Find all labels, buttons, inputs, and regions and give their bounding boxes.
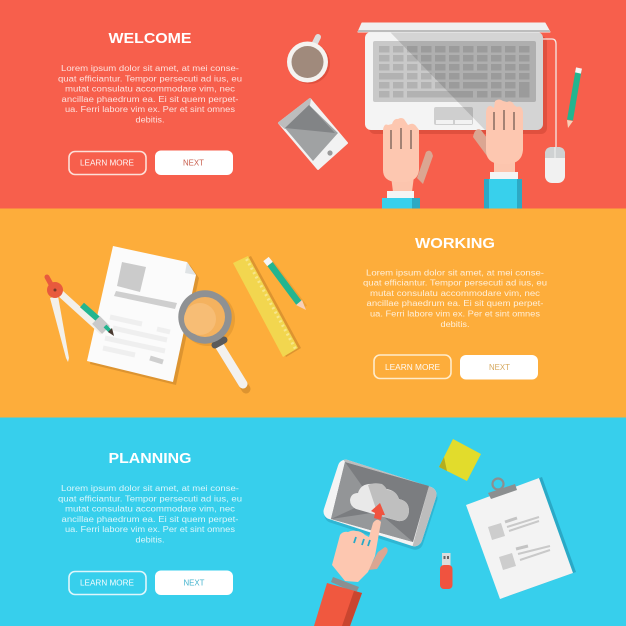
working body text: mutat consulatu accommodare vim, nec	[370, 289, 540, 298]
sleeve	[314, 583, 362, 626]
icon: document	[87, 246, 199, 385]
trackpad	[434, 107, 473, 125]
icon: magnifying glass	[178, 290, 246, 389]
button: learn more: LEARN MORE	[385, 363, 440, 372]
button: learn more	[69, 152, 146, 174]
working background	[0, 208, 626, 418]
button: next: NEXT	[184, 579, 205, 588]
icon: tablet	[324, 460, 438, 550]
checklist row 1	[488, 517, 539, 540]
welcome body text: Lorem ipsum dolor sit amet, at mei conse-	[61, 64, 239, 73]
clip	[488, 478, 517, 499]
welcome heading: WELCOME	[108, 30, 192, 47]
icon: ruler	[233, 256, 301, 357]
cloud icon	[350, 483, 409, 521]
planning body text: quat efficiantur. Tempor persecuti ad ius, eu	[58, 494, 242, 503]
working body text: Lorem ipsum dolor sit amet, at mei conse-	[366, 268, 544, 277]
welcome body text	[58, 64, 242, 124]
button: learn more: LEARN MORE	[80, 579, 134, 588]
icon: USB drive	[440, 553, 452, 589]
icon: smartphone	[279, 99, 347, 169]
button: next: NEXT	[489, 363, 510, 372]
welcome body text: debitis.	[136, 116, 164, 124]
planning body text	[58, 484, 242, 544]
icon: pencil	[567, 68, 579, 128]
working body text: ua. Ferri labore vim ex. Per et sint omnes	[370, 310, 540, 318]
icon: sticky note	[439, 439, 481, 481]
icon: mouse cable	[543, 39, 556, 148]
icon: compass	[47, 277, 114, 362]
planning body text: mutat consulatu accommodare vim, nec	[65, 505, 235, 514]
button: learn more	[69, 572, 146, 594]
working body text	[363, 268, 547, 329]
cuff	[331, 577, 359, 593]
checklist row 2	[499, 546, 550, 570]
icon: pencil	[266, 259, 306, 310]
document title bar	[114, 291, 177, 309]
document fold	[185, 262, 196, 275]
welcome background	[0, 0, 626, 209]
button: next: NEXT	[183, 158, 204, 168]
planning body text: ancillae phaedrum ea. Ei sit quem perpet-	[62, 515, 239, 524]
planning body text: Lorem ipsum dolor sit amet, at mei conse-	[61, 484, 239, 493]
left hand	[382, 118, 433, 208]
icon: mouse	[545, 147, 565, 183]
welcome body text: mutat consulatu accommodare vim, nec	[65, 85, 235, 94]
button: learn more	[374, 355, 451, 378]
keyboard	[373, 41, 536, 102]
hand on tablet	[314, 520, 388, 626]
working body text: quat efficiantur. Tempor persecuti ad ius, eu	[363, 279, 547, 288]
planning background	[0, 418, 626, 626]
welcome body text: quat efficiantur. Tempor persecuti ad ius, eu	[58, 74, 242, 83]
panel: planning	[0, 418, 626, 626]
planning heading: PLANNING	[108, 450, 192, 467]
icon: laptop	[358, 23, 550, 134]
button: learn more: LEARN MORE	[80, 158, 134, 168]
button: next	[460, 355, 538, 380]
image placeholder	[117, 262, 146, 292]
working heading: WORKING	[415, 235, 495, 252]
right hand	[473, 100, 523, 209]
upload arrow	[371, 503, 385, 520]
working body text: debitis.	[440, 320, 470, 329]
panel: welcome	[0, 0, 626, 209]
working body text: ancillae phaedrum ea. Ei sit quem perpet-	[366, 299, 544, 308]
icon: coffee cup	[287, 37, 330, 84]
planning body text: debitis.	[136, 536, 164, 544]
laptop lid	[358, 23, 550, 32]
panel: working	[0, 208, 626, 418]
button: next	[155, 570, 233, 595]
icon: clipboard	[466, 477, 576, 599]
button: next	[155, 150, 233, 175]
document text lines	[103, 317, 170, 362]
welcome body text: ua. Ferri labore vim ex. Per et sint omnes	[65, 105, 235, 114]
planning body text: ua. Ferri labore vim ex. Per et sint omnes	[65, 525, 235, 534]
welcome body text: ancillae phaedrum ea. Ei sit quem perpet-	[62, 95, 239, 104]
